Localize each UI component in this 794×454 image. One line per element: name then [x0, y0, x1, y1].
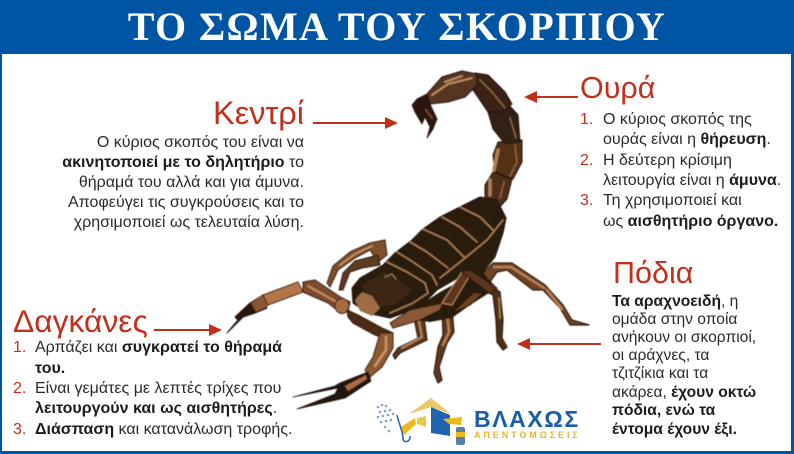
list: tail functions: 2. [580, 152, 593, 169]
text: legs description: τζιτζίκια και τα [612, 365, 708, 382]
panel: legs [612, 256, 756, 438]
list: tail functions: Ο κύριος σκοπός της [603, 111, 752, 128]
text: sting description: ακινητοποιεί με το δηλητήριο το [62, 154, 304, 171]
text: sting description: Αποφεύγει τις συγκρούσεις και το [68, 194, 304, 211]
text: legs description [612, 293, 756, 438]
list: pincer functions: 2. [13, 380, 26, 397]
list: pincer functions: 1. [13, 339, 26, 356]
list: tail functions: ως αισθητήριο όργανο. [603, 213, 778, 230]
panel: pincers [13, 303, 292, 438]
middle leg [434, 308, 454, 383]
list: pincer functions: Είναι γεμάτες με λεπτές τρίχες που [35, 380, 281, 397]
arrow: sting [313, 117, 398, 129]
leg joints [390, 270, 497, 328]
logo mark [376, 398, 465, 445]
text: sting description [62, 134, 304, 231]
logo [376, 398, 581, 445]
rear right leg [483, 263, 589, 325]
list: pincer functions: λειτουργούν και ως αισθητήρες. [35, 400, 277, 417]
text: legs description: έντομα έχουν έξι. [612, 421, 737, 438]
small folded legs [327, 240, 387, 290]
text: legs description: οι αράχνες, τα [612, 347, 709, 364]
list: tail functions: Τη χρησιμοποιεί και [603, 192, 742, 209]
title banner [0, 0, 794, 54]
panel: sting [62, 95, 304, 231]
text: legs description: ανήκουν οι σκορπιοί, [612, 329, 756, 346]
text: legs description: ακάρεα, έχουν οκτώ [612, 384, 756, 401]
panel: tail [580, 71, 781, 230]
heading: sting: Κεντρί [213, 95, 304, 131]
list: pincer functions: του. [35, 360, 65, 377]
list: tail functions: Η δεύτερη κρίσιμη [603, 152, 732, 169]
title banner: ΤΟ ΣΩΜΑ ΤΟΥ ΣΚΟΡΠΙΟΥ [128, 4, 666, 49]
logo tagline: ΑΠΕΝΤΟΜΩΣΕΙΣ [474, 430, 581, 440]
arrow: tail [524, 91, 578, 103]
heading: legs: Πόδια [613, 256, 693, 290]
text: sting description: Ο κύριος σκοπός του είναι να [97, 134, 304, 151]
list: pincer functions: 3. [13, 421, 26, 438]
text: legs description: Τα αραχνοειδή, η [612, 293, 738, 310]
logo name: ΒΛΑΧΩΣ [474, 406, 580, 432]
list: tail functions: λειτουργία είναι η άμυνα. [603, 172, 781, 189]
list: pincer functions [13, 339, 292, 438]
list: tail functions: 1. [580, 111, 593, 128]
lower pincer [293, 310, 393, 409]
front right leg [467, 272, 507, 350]
upper pincer [227, 280, 350, 333]
list: tail functions: ουράς είναι η θήρευση. [603, 131, 771, 148]
list: tail functions [580, 111, 781, 230]
text: sting description: χρησιμοποιεί ως τελευταία λύση. [74, 214, 304, 231]
text: sting description: θήραμά του αλλά και για άμυνα. [79, 174, 304, 191]
text: legs description: ομάδα στην οποία [612, 311, 737, 328]
heading: pincers: Δαγκάνες [13, 303, 148, 339]
stinger [412, 94, 437, 138]
list: pincer functions: Διάσπαση και κατανάλωση τροφής. [35, 421, 292, 438]
arrow: legs [517, 338, 601, 350]
tail [427, 71, 522, 209]
arrow: pincers [154, 324, 222, 336]
body [352, 197, 506, 318]
front leg [393, 310, 427, 359]
text: legs description: πόδια, ενώ τα [612, 402, 715, 419]
list: tail functions: 3. [580, 192, 593, 209]
list: pincer functions: Αρπάζει και συγκρατεί το θήραμά [35, 339, 282, 356]
heading: tail: Ουρά [580, 71, 655, 105]
